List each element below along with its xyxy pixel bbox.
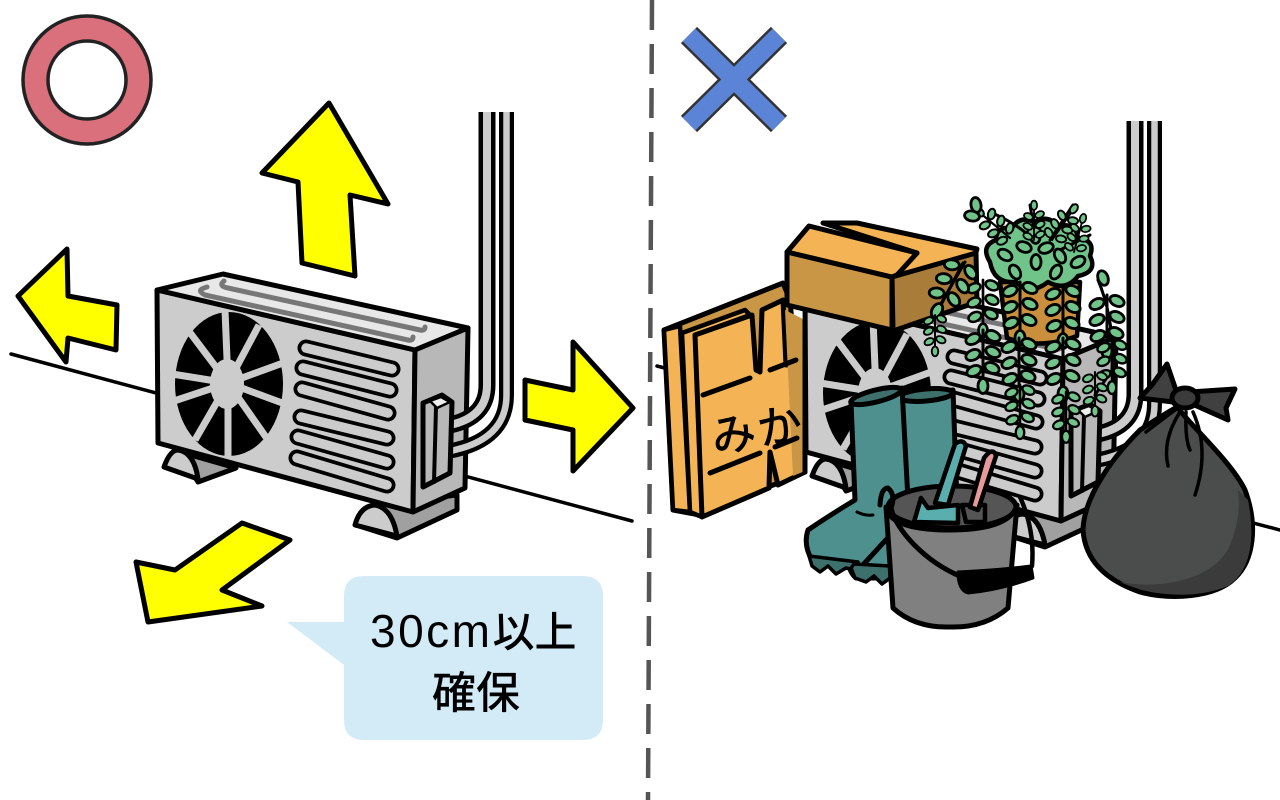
potted plant: [917, 197, 1128, 443]
divider: [648, 0, 652, 800]
garden tools: [914, 441, 996, 523]
arrow: right: [525, 342, 633, 471]
arrow: up: [262, 103, 388, 276]
cardboard box: [787, 223, 977, 331]
callout: 30cm clearance: 30cm以上: [370, 605, 576, 657]
cross mark: [689, 35, 779, 124]
rubber boots: [806, 384, 958, 584]
blocked AC unit: [805, 121, 1154, 547]
cardboard label text: みか: [708, 399, 809, 463]
outdoor AC unit: [157, 112, 506, 538]
arrow: forward: [136, 523, 290, 622]
ground line right: [657, 366, 1280, 530]
callout: 30cm clearance: 確保: [432, 669, 520, 718]
cardboard sheets: [664, 283, 809, 517]
garbage bag: [1083, 364, 1253, 596]
bucket: [880, 441, 1033, 627]
callout: 30cm clearance: [287, 576, 603, 740]
circle mark: [23, 16, 151, 144]
arrow: left: [18, 249, 117, 362]
ground line left: [11, 354, 632, 521]
right panel: bad installation: [657, 35, 1280, 627]
left panel: good installation: [11, 16, 633, 740]
